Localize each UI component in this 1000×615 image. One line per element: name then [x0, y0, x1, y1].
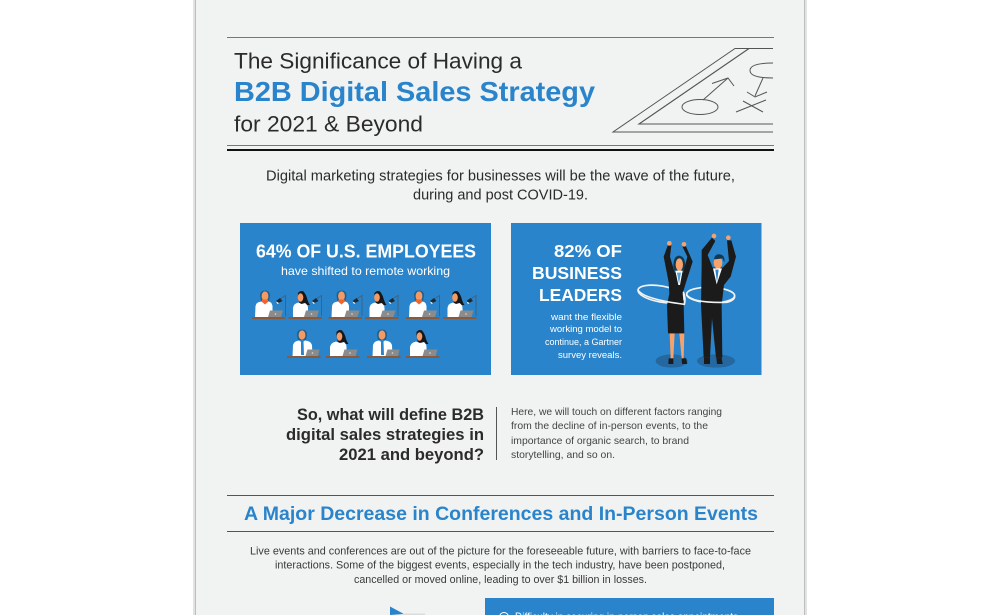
panel statistic: LEADERS	[539, 285, 622, 305]
section paragraph	[250, 546, 751, 586]
question heading: So, what will define B2B	[297, 405, 484, 424]
question heading	[286, 405, 484, 464]
intro text: during and post COVID-19.	[413, 188, 588, 204]
panel statistic	[532, 241, 622, 305]
panel: challenges list	[485, 598, 774, 615]
section heading: A Major Decrease in Conferences and In-Person Events	[244, 503, 758, 525]
section paragraph: interactions. Some of the biggest events, especially in the tech industry, have been postponed,	[275, 560, 725, 572]
title line 1: The Significance of Having a	[234, 48, 522, 74]
panel description: survey reveals.	[558, 350, 622, 361]
illustration: leaders with hoops	[637, 234, 736, 368]
question heading: 2021 and beyond?	[339, 445, 484, 464]
explanatory text: from the decline of in-person events, to the	[511, 420, 708, 432]
intro text	[266, 168, 735, 204]
explanatory text: Here, we will touch on different factors ranging	[511, 406, 722, 418]
explanatory text: storytelling, and so on.	[511, 449, 615, 461]
intro text: Digital marketing strategies for businesses will be the wave of the future,	[266, 168, 735, 184]
panel description: continue, a Gartner	[545, 337, 622, 348]
panel: business leaders	[511, 223, 762, 375]
panel heading: 64% OF U.S. EMPLOYEES	[256, 242, 476, 262]
panel: remote working employees	[240, 223, 491, 375]
panel subheading: have shifted to remote working	[281, 264, 450, 278]
panel description	[545, 312, 622, 361]
title line 3: for 2021 & Beyond	[234, 112, 423, 136]
panel description: working model to	[549, 324, 622, 335]
explanatory text	[511, 406, 722, 461]
title block	[227, 37, 774, 151]
icon: strategy playbook diagram	[613, 48, 773, 132]
question heading: digital sales strategies in	[286, 425, 484, 444]
section paragraph: Live events and conferences are out of the picture for the foreseeable future, with barriers to face-to-face	[250, 546, 751, 558]
page sheet	[193, 0, 807, 615]
icon: row of remote workers	[252, 290, 476, 319]
panel statistic: 82% OF	[554, 241, 622, 261]
section paragraph: cancelled or moved online, leading to over $1 billion in losses.	[354, 574, 647, 586]
explanatory text: importance of organic search, to brand	[511, 435, 689, 447]
panel statistic: BUSINESS	[532, 263, 622, 283]
title line 2: B2B Digital Sales Strategy	[234, 76, 596, 107]
panel description: want the flexible	[550, 312, 622, 323]
icon: second row of remote workers	[287, 330, 440, 358]
icon: bullet circle	[500, 612, 508, 615]
icon: blue pennant at bottom	[390, 606, 425, 615]
